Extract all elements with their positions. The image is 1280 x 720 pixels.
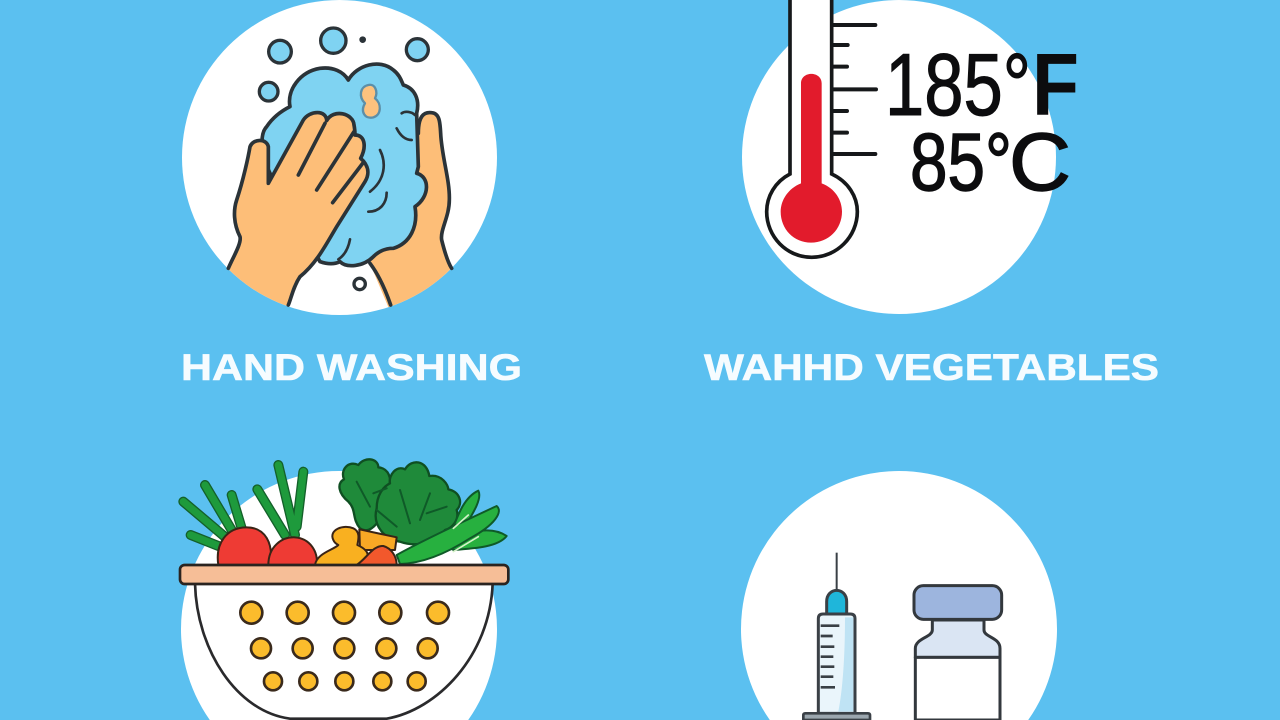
icon: soap foam [262, 64, 426, 266]
icon: left hand [228, 113, 368, 315]
icon: root vegetables [218, 527, 397, 565]
icon: right hand [370, 113, 452, 315]
panel: hand washing icon [182, 0, 497, 315]
icon: colander rim [180, 565, 508, 584]
heading: hand washing: HAND WASHING [181, 347, 522, 388]
icon: leek stalks [397, 491, 507, 564]
icon: syringe [803, 553, 870, 720]
heading: washed vegetables: WAHHD VEGETABLES [704, 347, 1159, 388]
icon: soap bubbles [259, 28, 428, 290]
icon: colander holes [240, 602, 449, 690]
text: 185 degrees F: 185° [885, 35, 1031, 134]
panel: vegetable colander icon [180, 459, 508, 720]
text: 85 degrees C: 85° [910, 117, 1012, 208]
icon: colander bowl [195, 583, 493, 719]
text: 185 degrees F: F [1032, 35, 1079, 134]
panel: thermometer icon [742, 0, 1079, 314]
icon: vaccine vial [914, 586, 1002, 720]
panel: vaccine icon [741, 471, 1057, 720]
icon: green onion stalks [183, 465, 303, 547]
text: 85 degrees C: C [1009, 117, 1071, 208]
icon: thermometer [767, 0, 876, 257]
infographic canvas [178, 0, 1158, 720]
icon: leafy greens [339, 459, 460, 544]
